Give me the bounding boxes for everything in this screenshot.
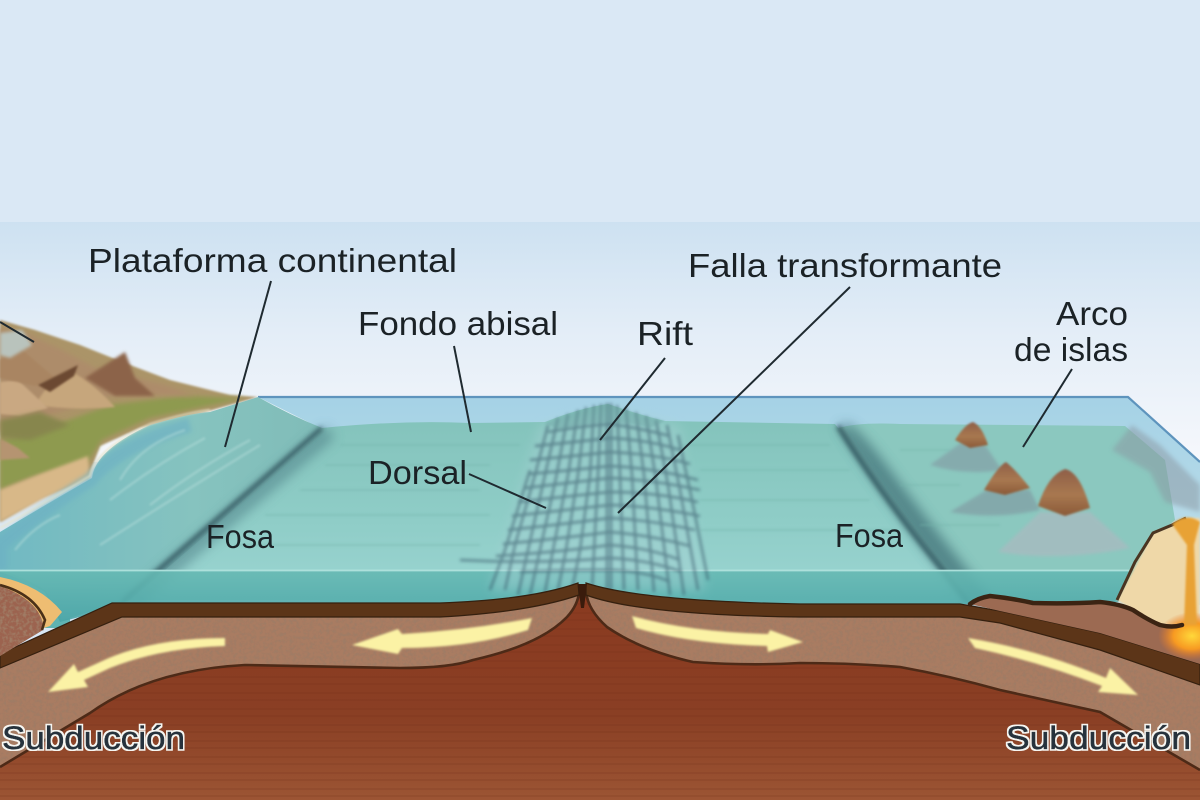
label: ridge: Dorsal	[368, 454, 467, 491]
arrow: left plate far	[48, 638, 225, 692]
background: sky gradient	[0, 222, 1200, 462]
label: trench right: Fosa	[835, 517, 904, 554]
label: rift: Rift	[637, 315, 693, 352]
sea surface: back water volume	[258, 397, 1200, 605]
label: island arc line 1: Arco	[1056, 295, 1128, 332]
oceanic crust band: right	[586, 583, 1200, 685]
rift and transform fault grid	[460, 403, 708, 595]
distant island chain	[1112, 425, 1200, 512]
label: subduction left: Subducción	[2, 720, 185, 756]
overriding plate and volcano	[970, 517, 1200, 664]
trench shadow: left	[122, 428, 330, 604]
leader lines	[0, 281, 1072, 513]
label: transform fault: Falla transformante	[688, 247, 1002, 284]
label: abyssal plain: Fondo abisal	[358, 305, 558, 342]
hills	[35, 372, 115, 409]
lithosphere: crust layer	[0, 590, 1200, 800]
submarine cones	[930, 442, 1002, 472]
label: subduction right: Subducción	[1006, 720, 1191, 756]
abyssal plain floor	[120, 404, 970, 600]
water fill at the left coast	[0, 560, 70, 628]
light wash behind grid	[490, 406, 705, 590]
right floor with island arc	[838, 422, 1200, 604]
background: pale blue upper area	[0, 0, 1200, 223]
continental block: left cross-section	[0, 577, 62, 656]
trench shadow: right	[838, 424, 995, 604]
ridge crest shading	[545, 404, 665, 430]
mantle	[0, 592, 1200, 800]
labels	[88, 242, 1128, 555]
plate motion arrows	[48, 616, 1138, 695]
floor texture lines	[235, 445, 1000, 545]
label: island arc line 2: de islas	[1014, 331, 1128, 368]
label: trench left: Fosa	[206, 518, 275, 555]
mantle boundary line	[0, 592, 1200, 770]
magma chamber	[1158, 612, 1200, 660]
arrow: right plate center	[632, 616, 803, 652]
label: continental shelf: Plataforma continental	[88, 242, 457, 279]
arrow: left plate center	[352, 618, 532, 654]
mid-ocean ridge cleft	[578, 584, 587, 608]
oceanic crust band: left	[0, 583, 579, 668]
island peaks	[955, 422, 988, 448]
water front edge highlight	[0, 570, 1130, 572]
mantle strata	[0, 592, 1200, 800]
continental shelf slope	[0, 397, 322, 620]
arrow: right plate far	[968, 638, 1138, 695]
front water band	[0, 570, 1150, 622]
coastal land with hills	[0, 320, 258, 522]
lava conduit	[1172, 517, 1200, 625]
